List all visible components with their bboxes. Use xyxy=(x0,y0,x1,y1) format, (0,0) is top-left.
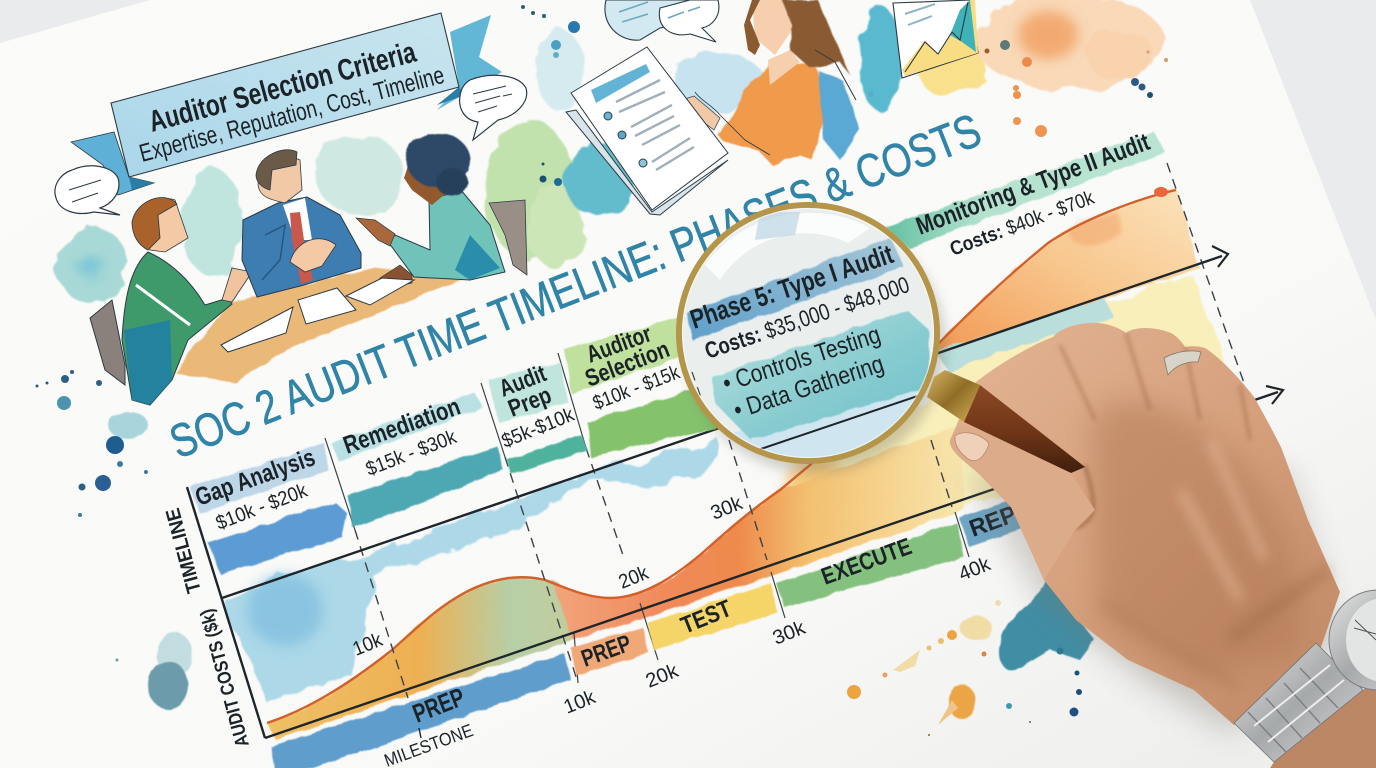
phase: Remediation: Remediation xyxy=(340,393,464,460)
phase: Auditor Selection: Auditor xyxy=(583,320,655,369)
phase: Monitoring & Type II Audit xyxy=(886,128,1165,261)
shadow beneath hand and lens xyxy=(685,217,1340,735)
timeline band: EXECUTE xyxy=(776,523,964,608)
title: SOC 2 AUDIT TIME TIMELINE: PHASES & COSTS xyxy=(162,103,988,468)
figure: woman presenting report xyxy=(676,0,860,165)
timeline band: REP partly hidden xyxy=(959,490,1050,547)
phase: Gap Analysis: $10k - $20k xyxy=(213,479,311,535)
lens banner: Phase 5 xyxy=(686,237,904,340)
hand holding magnifier xyxy=(950,323,1340,725)
banner title: Auditor Selection Criteria xyxy=(145,36,420,139)
paint splatters left xyxy=(36,370,193,709)
magnifier lens content xyxy=(682,208,934,458)
phase: Gap Analysis xyxy=(190,443,347,575)
figure: man in green sweater xyxy=(90,198,252,405)
phase: Auditor Selection: $10k - $15k xyxy=(590,361,684,415)
forearm xyxy=(1270,680,1376,768)
lens text: costs: Costs: $35,000 - $48,000 xyxy=(701,271,913,364)
phase: Remediation: $15k - $30k xyxy=(363,426,460,481)
speech bubble right xyxy=(460,75,527,140)
thumbnail xyxy=(955,433,989,461)
watch bracelet xyxy=(1234,643,1363,762)
top speech bubble pair xyxy=(605,0,719,42)
banner: Auditor Selection Criteria xyxy=(71,13,502,195)
axis lines xyxy=(187,246,1283,738)
table papers xyxy=(221,278,414,352)
phase: Auditor Selection xyxy=(565,312,717,457)
illustration: meeting table xyxy=(175,267,461,383)
magnifier handle xyxy=(964,385,1085,473)
chart: cost area right xyxy=(939,188,1200,350)
magnifier xyxy=(670,200,1085,475)
banner criteria list: Expertise, Reputation, Cost, Timeline xyxy=(136,61,447,168)
lens box: activities xyxy=(712,310,929,440)
timeline band: REP partly hidden: REP xyxy=(966,501,1020,543)
hand shading and creases xyxy=(1060,333,1330,690)
lens box: activities: • Data Gathering xyxy=(730,350,887,425)
paint splatters top xyxy=(521,5,1168,186)
chart document top right xyxy=(893,0,978,78)
phase: Remediation xyxy=(331,392,504,528)
phase: Audit Prep: $5k-$10k xyxy=(499,403,578,453)
figure: man in blue suit xyxy=(242,150,361,297)
magnifier gold ring xyxy=(679,205,937,461)
document stack with lines xyxy=(566,47,728,215)
watercolor: yellow wash right xyxy=(770,277,1248,565)
watercolor: blue wash under timeline xyxy=(226,440,720,703)
axis label: TIMELINE: TIMELINE xyxy=(162,506,206,595)
timeline band: PREP orange: PREP xyxy=(578,630,635,673)
thumb xyxy=(950,425,1095,580)
cost tick labels: 30k xyxy=(770,616,809,650)
phase: Monitoring & Type II Audit: Costs: $40k - $70k xyxy=(947,187,1098,261)
timeline band: TEST xyxy=(647,583,778,650)
timeline band: TEST: TEST xyxy=(677,595,736,640)
cost tick labels xyxy=(350,492,994,719)
cost tick labels: 20k xyxy=(616,562,653,594)
cost tick labels: 10k xyxy=(350,629,387,661)
phase: Monitoring & Type II Audit: Monitoring & Type II Audit xyxy=(912,128,1154,241)
orange wash core xyxy=(1018,11,1078,59)
timeline band: EXECUTE: EXECUTE xyxy=(818,533,915,591)
cost tick labels: 30k xyxy=(708,492,746,525)
timeline band: PREP blue xyxy=(271,653,571,768)
chart: cost area left xyxy=(267,578,572,740)
phase: Auditor Selection: Selection xyxy=(581,336,673,393)
timeline band: PREP blue: PREP xyxy=(408,682,469,729)
paint splatters bottom right xyxy=(847,580,1095,736)
phase: Audit Prep: Prep xyxy=(504,382,555,423)
phase dividers and dashed guide lines xyxy=(325,163,1244,698)
chart: cost area middle xyxy=(552,425,965,640)
speech bubble left xyxy=(55,166,120,215)
cost tick labels: 10k xyxy=(561,686,599,719)
phase: Gap Analysis: Gap Analysis xyxy=(192,443,319,512)
axis label: AUDIT COSTS: AUDIT COSTS ($k) xyxy=(197,607,254,749)
cost tick labels: 20k xyxy=(643,659,682,693)
watercolor washes behind illustrations xyxy=(56,0,1165,303)
watch case xyxy=(1329,590,1376,690)
figure: woman in teal xyxy=(356,133,527,288)
phase: Audit Prep xyxy=(489,360,587,475)
chart: cost curve line xyxy=(267,190,1176,723)
wedding ring xyxy=(1164,351,1201,375)
lens box: activities: • Controls Testing xyxy=(719,320,884,398)
phase: Audit Prep: Audit xyxy=(495,360,550,403)
cost tick labels: 40k xyxy=(956,553,994,586)
lens banner: Phase 5: Phase 5: Type I Audit xyxy=(686,239,897,335)
magnifier ferrule xyxy=(927,370,980,422)
